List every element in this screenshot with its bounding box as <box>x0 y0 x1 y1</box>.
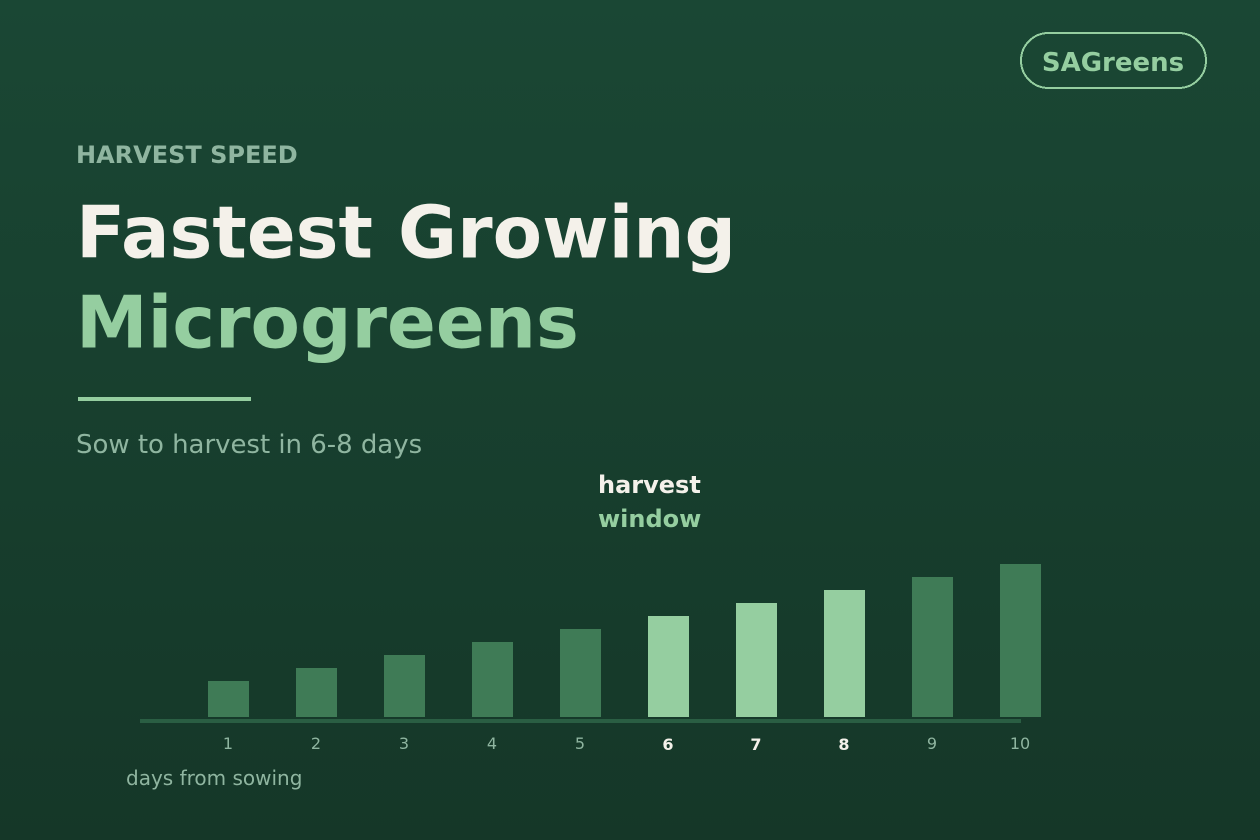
title: Microgreens <box>76 280 579 364</box>
day labels: 4 <box>487 734 497 753</box>
day labels: 1 <box>223 734 233 753</box>
callout: harvest window: window <box>598 505 701 533</box>
day labels: 6 <box>662 735 674 754</box>
day labels: 7 <box>750 735 762 754</box>
day labels: 9 <box>927 734 937 753</box>
bars <box>208 564 1041 717</box>
day labels: 5 <box>575 734 585 753</box>
eyebrow heading: HARVEST SPEED <box>76 141 298 169</box>
callout: harvest window <box>598 471 701 533</box>
subtitle: Sow to harvest in 6-8 days <box>76 430 422 460</box>
day labels: 8 <box>838 735 850 754</box>
day labels: 10 <box>1010 734 1030 753</box>
day labels: 3 <box>399 734 409 753</box>
brand badge: SAGreens: SAGreens <box>1042 48 1184 78</box>
callout: harvest window: harvest <box>598 471 701 499</box>
chart baseline <box>140 719 1021 723</box>
title underline <box>78 397 251 401</box>
day labels: 2 <box>311 734 321 753</box>
axis label: days from sowing <box>126 766 302 790</box>
day labels <box>223 734 1030 754</box>
bar chart: days from sowing <box>126 564 1041 790</box>
brand badge: SAGreens <box>1021 33 1206 88</box>
title: Fastest Growing <box>76 190 736 274</box>
title <box>76 190 736 364</box>
